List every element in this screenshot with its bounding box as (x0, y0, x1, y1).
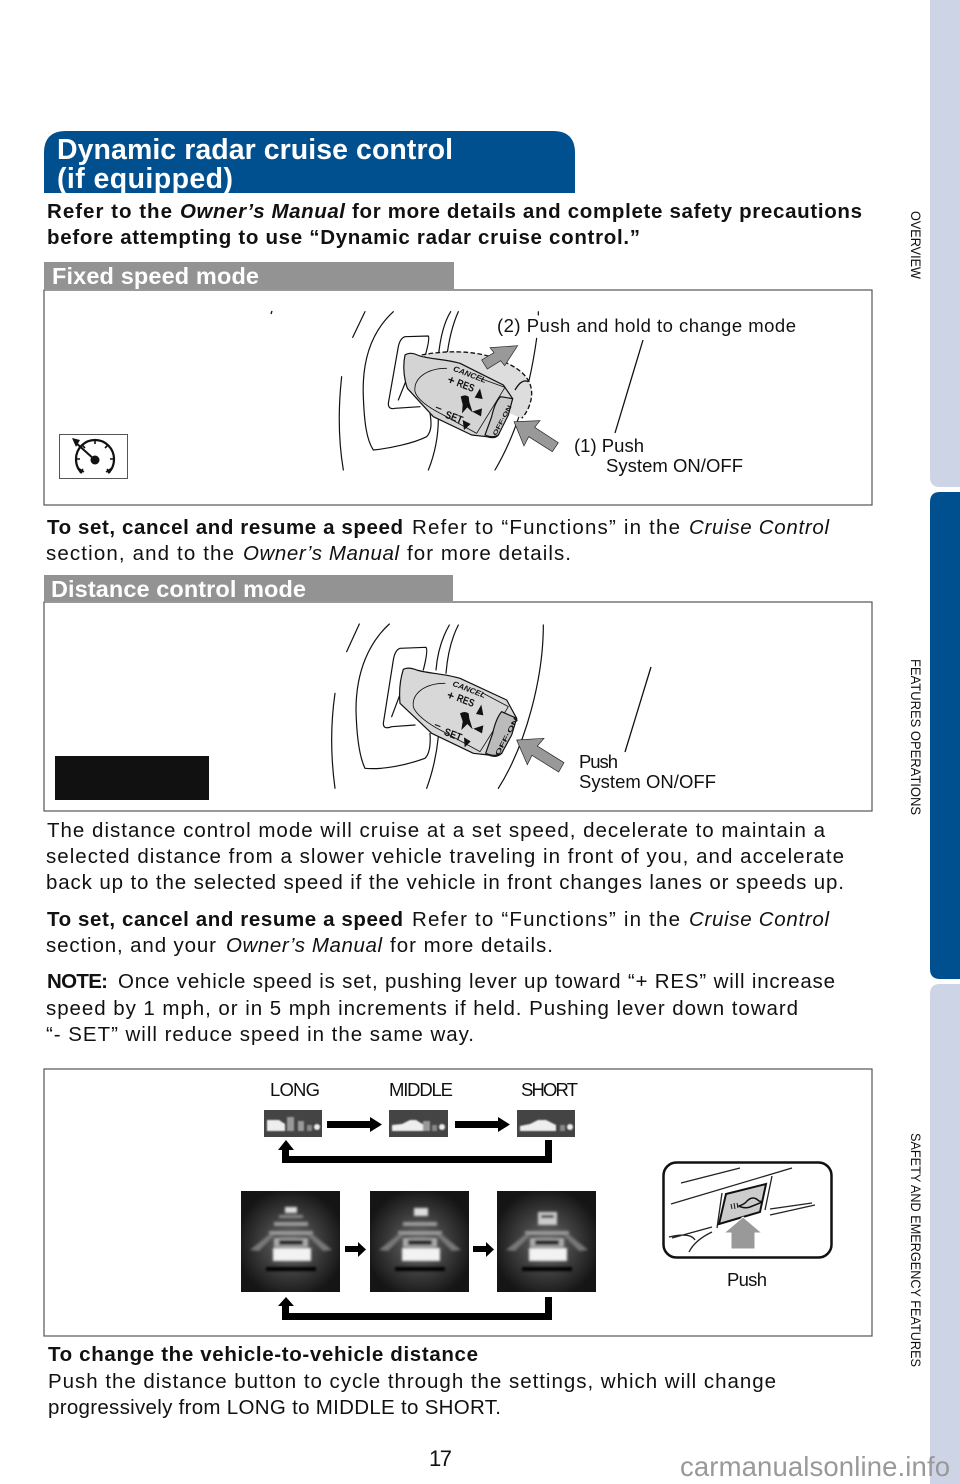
arrow: middle to short (455, 1117, 510, 1132)
illustration: cruise lever with mode push: OFF·ON (492, 405, 513, 437)
watermark: carmanualsonline.info (680, 1451, 950, 1482)
illustration: cruise lever with mode push: SET (443, 409, 465, 427)
text: set, cancel, resume: for more details. (390, 934, 553, 957)
arrow: short back to long view (278, 1297, 552, 1320)
blacked-out display (55, 756, 209, 800)
illustration: cruise lever with mode push: – (433, 400, 445, 415)
intro text (47, 200, 862, 249)
intro text: Owner’s Manual (180, 200, 346, 223)
callout line (625, 667, 651, 752)
label: middle: MIDDLE (389, 1079, 453, 1100)
title banner: Dynamic radar cruise control (57, 134, 453, 166)
arrow: push and hold (482, 346, 518, 369)
text: note: speed by 1 mph, or in 5 mph increments if held. Pushing lever down toward (46, 997, 798, 1020)
heading: distance control mode: Distance control mode (51, 576, 306, 602)
panel: distance control mode (44, 602, 872, 811)
title banner: (if equipped) (57, 163, 233, 195)
text: set, cancel, resume: Cruise Control (689, 516, 830, 539)
text: distance control description (46, 819, 844, 894)
text: change distance: progressively from LONG to MIDDLE to SHORT. (48, 1396, 501, 1419)
radar view: short (497, 1191, 596, 1292)
text: note: “- SET” will reduce speed in the same way. (46, 1023, 474, 1046)
text: distance control description: back up to the selected speed if the vehicle in front changes lanes or speeds up. (46, 871, 844, 894)
icon: short display (517, 1110, 575, 1137)
radar view: long (241, 1191, 340, 1292)
intro text: Refer to the (47, 200, 172, 223)
illustration: cruise lever with mode push: CANCEL (452, 364, 488, 385)
text: set, cancel, resume (46, 908, 830, 957)
intro text: for more details and complete safety precautions (352, 200, 862, 223)
arrow: short back to long (278, 1140, 552, 1163)
text: change distance: Push the distance button to cycle through the settings, which will change (48, 1370, 776, 1393)
arrow: long to middle (327, 1117, 382, 1132)
panel: fixed speed mode (44, 290, 872, 505)
label: long: LONG (270, 1079, 320, 1100)
label: push system on off (574, 435, 743, 476)
illustration: cruise lever with mode push: RES (455, 377, 476, 395)
text: set, cancel, resume: Owner’s Manual (243, 542, 400, 565)
sidebar label: safety and emergency features: SAFETY AND EMERGENCY FEATURES (908, 1133, 924, 1367)
text: set, cancel, resume: Refer to “Functions” in the (412, 516, 680, 539)
text: set, cancel, resume: Cruise Control (689, 908, 830, 931)
sidebar tabs (930, 0, 960, 1484)
icon: distance button (664, 1162, 832, 1258)
callout lines (271, 311, 643, 433)
label: push: Push (727, 1269, 767, 1290)
arrow: long to middle view (345, 1242, 366, 1257)
label: push system on off: System ON/OFF (606, 455, 743, 476)
text: note: NOTE: (47, 970, 108, 993)
tab: features and operations (930, 492, 960, 979)
text: set, cancel, resume: Refer to “Functions” in the (412, 908, 680, 931)
illustration: cruise lever with mode push (339, 312, 558, 470)
text: distance control description: The distance control mode will cruise at a set speed, decelerate to maintain a (47, 819, 826, 842)
arrow: middle to short view (473, 1242, 494, 1257)
label: push system on off: (1) Push (574, 435, 644, 456)
heading: fixed speed mode: Fixed speed mode (52, 263, 259, 289)
icon: middle display (389, 1110, 448, 1137)
heading: distance control mode (44, 575, 453, 602)
illustration: cruise lever: OFF·ON (494, 716, 520, 757)
sidebar label: features operations: FEATURES OPERATIONS (908, 659, 924, 815)
page number: 17 (429, 1446, 452, 1471)
tab: overview (930, 0, 960, 487)
illustration: cruise lever: CANCEL (451, 679, 487, 700)
illustration: cruise lever: – (432, 717, 444, 733)
tab: safety and emergency features (930, 984, 960, 1484)
illustration: cruise lever: SET (442, 726, 464, 744)
intro text: before attempting to use “Dynamic radar cruise control.” (47, 226, 640, 249)
text: change distance: To change the vehicle-to-vehicle distance (48, 1343, 478, 1366)
text: set, cancel, resume: To set, cancel and resume a speed (47, 908, 403, 931)
arrow: push (514, 421, 558, 452)
label: short: SHORT (521, 1079, 578, 1100)
panel: distance settings (44, 1069, 872, 1336)
label: push and hold: (2) Push and hold to change mode (497, 315, 796, 336)
label: push system on off (579, 751, 716, 792)
illustration: cruise lever: RES (455, 692, 476, 710)
illustration: cruise lever with mode push: + (446, 372, 457, 388)
label: push system on off: Push (579, 751, 618, 772)
text: set, cancel, resume: To set, cancel and resume a speed (47, 516, 403, 539)
radar view: middle (370, 1191, 469, 1292)
title banner (44, 131, 575, 195)
illustration: cruise lever (332, 624, 564, 788)
text: set, cancel, resume: section, and to the (46, 542, 234, 565)
text: set, cancel, resume (46, 516, 830, 565)
icon: long display (264, 1110, 322, 1137)
text: set, cancel, resume: section, and your (46, 934, 216, 957)
text: change distance (48, 1343, 776, 1419)
illustration: cruise lever: + (445, 688, 456, 703)
text: note: Once vehicle speed is set, pushing lever up toward “+ RES” will increase (118, 970, 835, 993)
arrow: push (517, 738, 564, 772)
arrow: push button (724, 1217, 762, 1249)
icon: speedometer (60, 434, 128, 478)
heading: fixed speed mode (44, 262, 454, 289)
text: set, cancel, resume: for more details. (407, 542, 571, 565)
text: distance control description: selected distance from a slower vehicle traveling in front of you, and accelerate (46, 845, 844, 868)
text: note (46, 970, 835, 1046)
sidebar label: overview: OVERVIEW (908, 211, 924, 280)
label: push system on off: System ON/OFF (579, 771, 716, 792)
text: set, cancel, resume: Owner’s Manual (226, 934, 383, 957)
